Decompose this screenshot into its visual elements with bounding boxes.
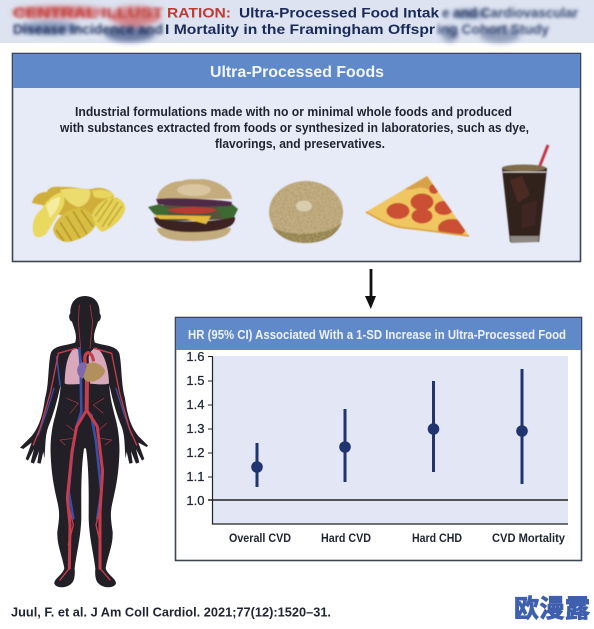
y axis: 1.4 (186, 397, 204, 412)
panel: hazard ratio chart (176, 318, 582, 560)
arteries (33, 305, 137, 580)
header title line 1: e and Cardiovascular (442, 4, 579, 20)
data point: hard CHD (428, 381, 439, 472)
y axis: 1.6 (186, 349, 204, 364)
arrow (365, 269, 376, 309)
header title line 2: I Mortality in the Framingham Offspr (165, 21, 436, 37)
icon: pizza slice (366, 176, 469, 237)
x axis labels: Hard CHD (412, 533, 462, 545)
header band (0, 0, 594, 43)
reference line at 1.0 (208, 499, 568, 501)
icon: human body circulatory system (20, 296, 148, 587)
chart: plot area (186, 349, 568, 524)
icon: cola with straw (502, 145, 548, 243)
panel heading: Ultra-Processed Foods (210, 64, 384, 81)
header title line 2: ing Cohort Study (437, 21, 549, 37)
data point: overall CVD (251, 443, 263, 487)
icon: hamburger (148, 179, 238, 241)
panel heading (13, 54, 580, 88)
header title line 1: RATION: (167, 4, 231, 20)
header title line 2: Disease Incidence and (13, 21, 163, 37)
y axis: 1.2 (186, 445, 204, 460)
y axis: 1.5 (186, 373, 204, 388)
smudged header patches (12, 6, 520, 43)
definition text: with substances extracted from foods or synthesized in laboratories, such as dye, (59, 121, 529, 135)
chart heading: HR (95% CI) Associated With a 1-SD Increase in Ultra-Processed Food (188, 328, 566, 342)
x axis labels: Hard CVD (321, 533, 371, 545)
x axis labels (229, 533, 566, 545)
definition text: flavorings, and preservatives. (215, 137, 385, 151)
header title line 1: CENTRAL ILLUST (13, 4, 164, 20)
data point: CVD mortality (516, 369, 528, 484)
body silhouette (20, 296, 148, 587)
header title line 1: Ultra-Processed Food Intak (239, 4, 439, 20)
watermark: 欧漫露 (514, 595, 590, 623)
y axis: 1.0 (186, 493, 204, 508)
y axis: 1.3 (186, 421, 204, 436)
y axis (186, 349, 568, 524)
lungs (65, 348, 109, 384)
chart heading (176, 318, 581, 350)
icon: bagel (269, 181, 343, 243)
definition text (59, 105, 529, 151)
x axis labels: Overall CVD (229, 533, 291, 545)
citation: Juul, F. et al. J Am Coll Cardiol. 2021;77(12):1520–31. (11, 606, 331, 620)
header title line 1 (13, 4, 579, 20)
icon: potato chips (32, 187, 125, 242)
heart (82, 363, 105, 382)
veins (38, 348, 132, 518)
data point: hard CVD (339, 409, 351, 482)
panel: ultra-processed foods (12, 54, 580, 262)
definition text: Industrial formulations made with no or minimal whole foods and produced (75, 105, 512, 119)
header title line 2 (13, 21, 549, 37)
x axis labels: CVD Mortality (492, 533, 566, 545)
y axis: 1.1 (186, 469, 204, 484)
